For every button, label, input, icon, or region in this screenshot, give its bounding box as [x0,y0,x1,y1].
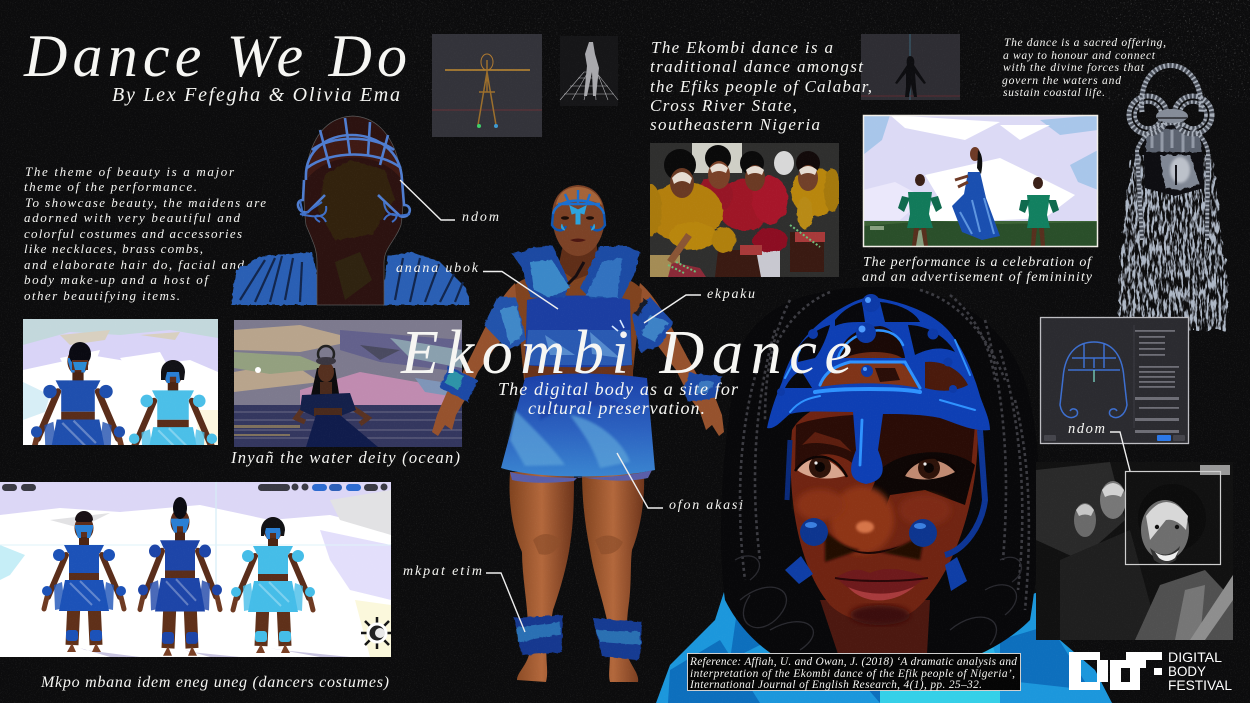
side hooks [800,518,828,546]
dancer right [129,360,217,503]
icon: ndom wireframe [1060,342,1127,418]
logo: Digital Body Festival: DIGITAL [1168,649,1222,665]
skirt [501,374,655,476]
text block: theme of beauty: The theme of beauty is a major [25,164,235,179]
forehead shadow [795,414,975,490]
image: ekombi dancers photo [638,143,840,277]
text block: Ekombi dance intro: Cross River State, [650,96,797,115]
image: export dialog with ndom [1040,318,1188,444]
dancer 3 [231,517,315,653]
image: blender viewport with rig [432,34,542,137]
top [525,296,632,367]
reference box: interpretation of the Ekombi dance of the Efik people of Nigeria’, [690,668,1015,680]
anklets [514,615,642,660]
dancer 1 [42,516,126,652]
face [791,392,978,622]
dancer left [31,348,125,500]
byline: By Lex Fefegha & Olivia Ema [112,84,400,106]
toolbar [2,484,17,491]
text block: Ekombi dance intro: traditional dance amongst [650,57,864,76]
label: ndom (dialog): ndom [1068,421,1105,437]
image: outlined head with ndom headpiece [231,116,470,305]
eyes and mouth [561,216,569,220]
collar ruffles [512,246,640,298]
text block: theme of beauty: like necklaces, brass combs, [24,241,203,256]
text block: theme of beauty: theme of the performance. [24,179,197,194]
left arm [432,283,523,436]
image: two dancers on white [23,319,218,503]
mask ndom [552,190,605,230]
text block: sacred offering: The dance is a sacred offering, [1004,36,1166,49]
text block: theme of beauty: body make-up and a host of [24,272,210,287]
caption: Mkpo: Mkpo mbana idem eneg uneg (dancers costumes) [40,674,389,691]
image: silhouette viewport [861,34,960,100]
neck [820,600,930,690]
image: Inyañ deity over ocean [234,320,462,447]
callout: mkpat etim: mkpat etim [403,564,482,579]
label: ndom: ndom [462,210,499,225]
callout: mkpat etim [403,564,525,632]
image: black and white photo of dancers [1036,462,1233,640]
side straps [945,430,985,555]
helmet windows [838,326,905,358]
lips [837,569,925,596]
text block: sacred offering: sustain coastal life. [1003,86,1105,99]
text block: Ekombi dance intro: southeastern Nigeria [650,115,820,134]
label line: ndom [400,180,455,220]
text block: sacred offering: a way to honour and connect [1003,49,1156,62]
wristbands [440,366,722,402]
eyes [795,456,847,478]
reference box [688,654,1020,691]
logo: Digital Body Festival: FESTIVAL [1168,677,1232,693]
title: Dance We Do [23,23,407,89]
helmet [767,297,990,484]
text block: theme of beauty: To showcase beauty, the maidens are [25,195,266,210]
dancer 2 [138,509,222,656]
caption: performance [862,255,1093,285]
armbands [484,296,673,352]
caption: performance: and an advertisement of femininity [862,270,1093,285]
callout: anana ubok [396,261,558,309]
caption: Inyañ: Inyañ the water deity (ocean) [230,448,460,467]
helmet beads [862,294,880,312]
torso [515,271,642,380]
icon: rope tassel [1118,66,1228,330]
hair mass [721,287,1039,680]
image: three dancers costumes viewport [0,482,391,657]
text block: sacred offering: with the divine forces that [1003,61,1145,74]
subheading: The digital body as a site for [498,379,739,399]
helmet highlights [785,330,975,465]
shoulders [656,570,1112,703]
text block: Ekombi dance intro: the Efiks people of Calabar, [650,77,872,96]
big face with headpiece [656,287,1112,703]
reference box: International Journal of English Research, 4(1), pp. 25–32. [689,679,982,691]
dialog options [1135,330,1179,433]
text block: theme of beauty [24,164,266,303]
text block: Ekombi dance intro [650,38,872,134]
neck and head [558,240,600,280]
text block: theme of beauty: colorful costumes and accessories [24,226,242,241]
text block: Ekombi dance intro: The Ekombi dance is a [651,38,833,57]
gizmo icon [361,617,391,649]
callout: ekpaku [644,287,755,323]
right leg [582,472,644,682]
reference box: Reference: Affiah, U. and Owan, J. (2018) ‘A dramatic analysis and [689,656,1017,668]
cheeks / nose [830,486,894,554]
subheading: cultural preservation. [528,398,705,418]
heading: Ekombi Dance: Ekombi Dance [400,319,852,387]
text block: theme of beauty: and elaborate hair do, facial and [24,257,244,272]
caption: performance: The performance is a celebration of [863,255,1093,270]
right arm [632,283,724,436]
subheading [498,379,739,418]
text block: sacred offering: govern the waters and [1002,74,1121,87]
callout: ofon akasi: ofon akasi [669,498,743,513]
text block: theme of beauty: adorned with very beautiful and [24,210,240,225]
text block: sacred offering [1002,36,1166,99]
label line: ndom (dialog) [1110,432,1130,471]
central 3D figure [432,185,724,682]
left leg [510,472,574,682]
logo: Digital Body Festival [1069,649,1232,693]
image: wireframe floor with figure [560,36,618,106]
callout: anana ubok: anana ubok [396,261,479,276]
callout: ofon akasi [617,453,743,513]
text block: theme of beauty: other beautifying items. [24,288,180,303]
logo: Digital Body Festival: BODY [1168,663,1207,679]
image: sky photo with three dancers [863,115,1098,247]
callout: ekpaku: ekpaku [707,287,755,302]
